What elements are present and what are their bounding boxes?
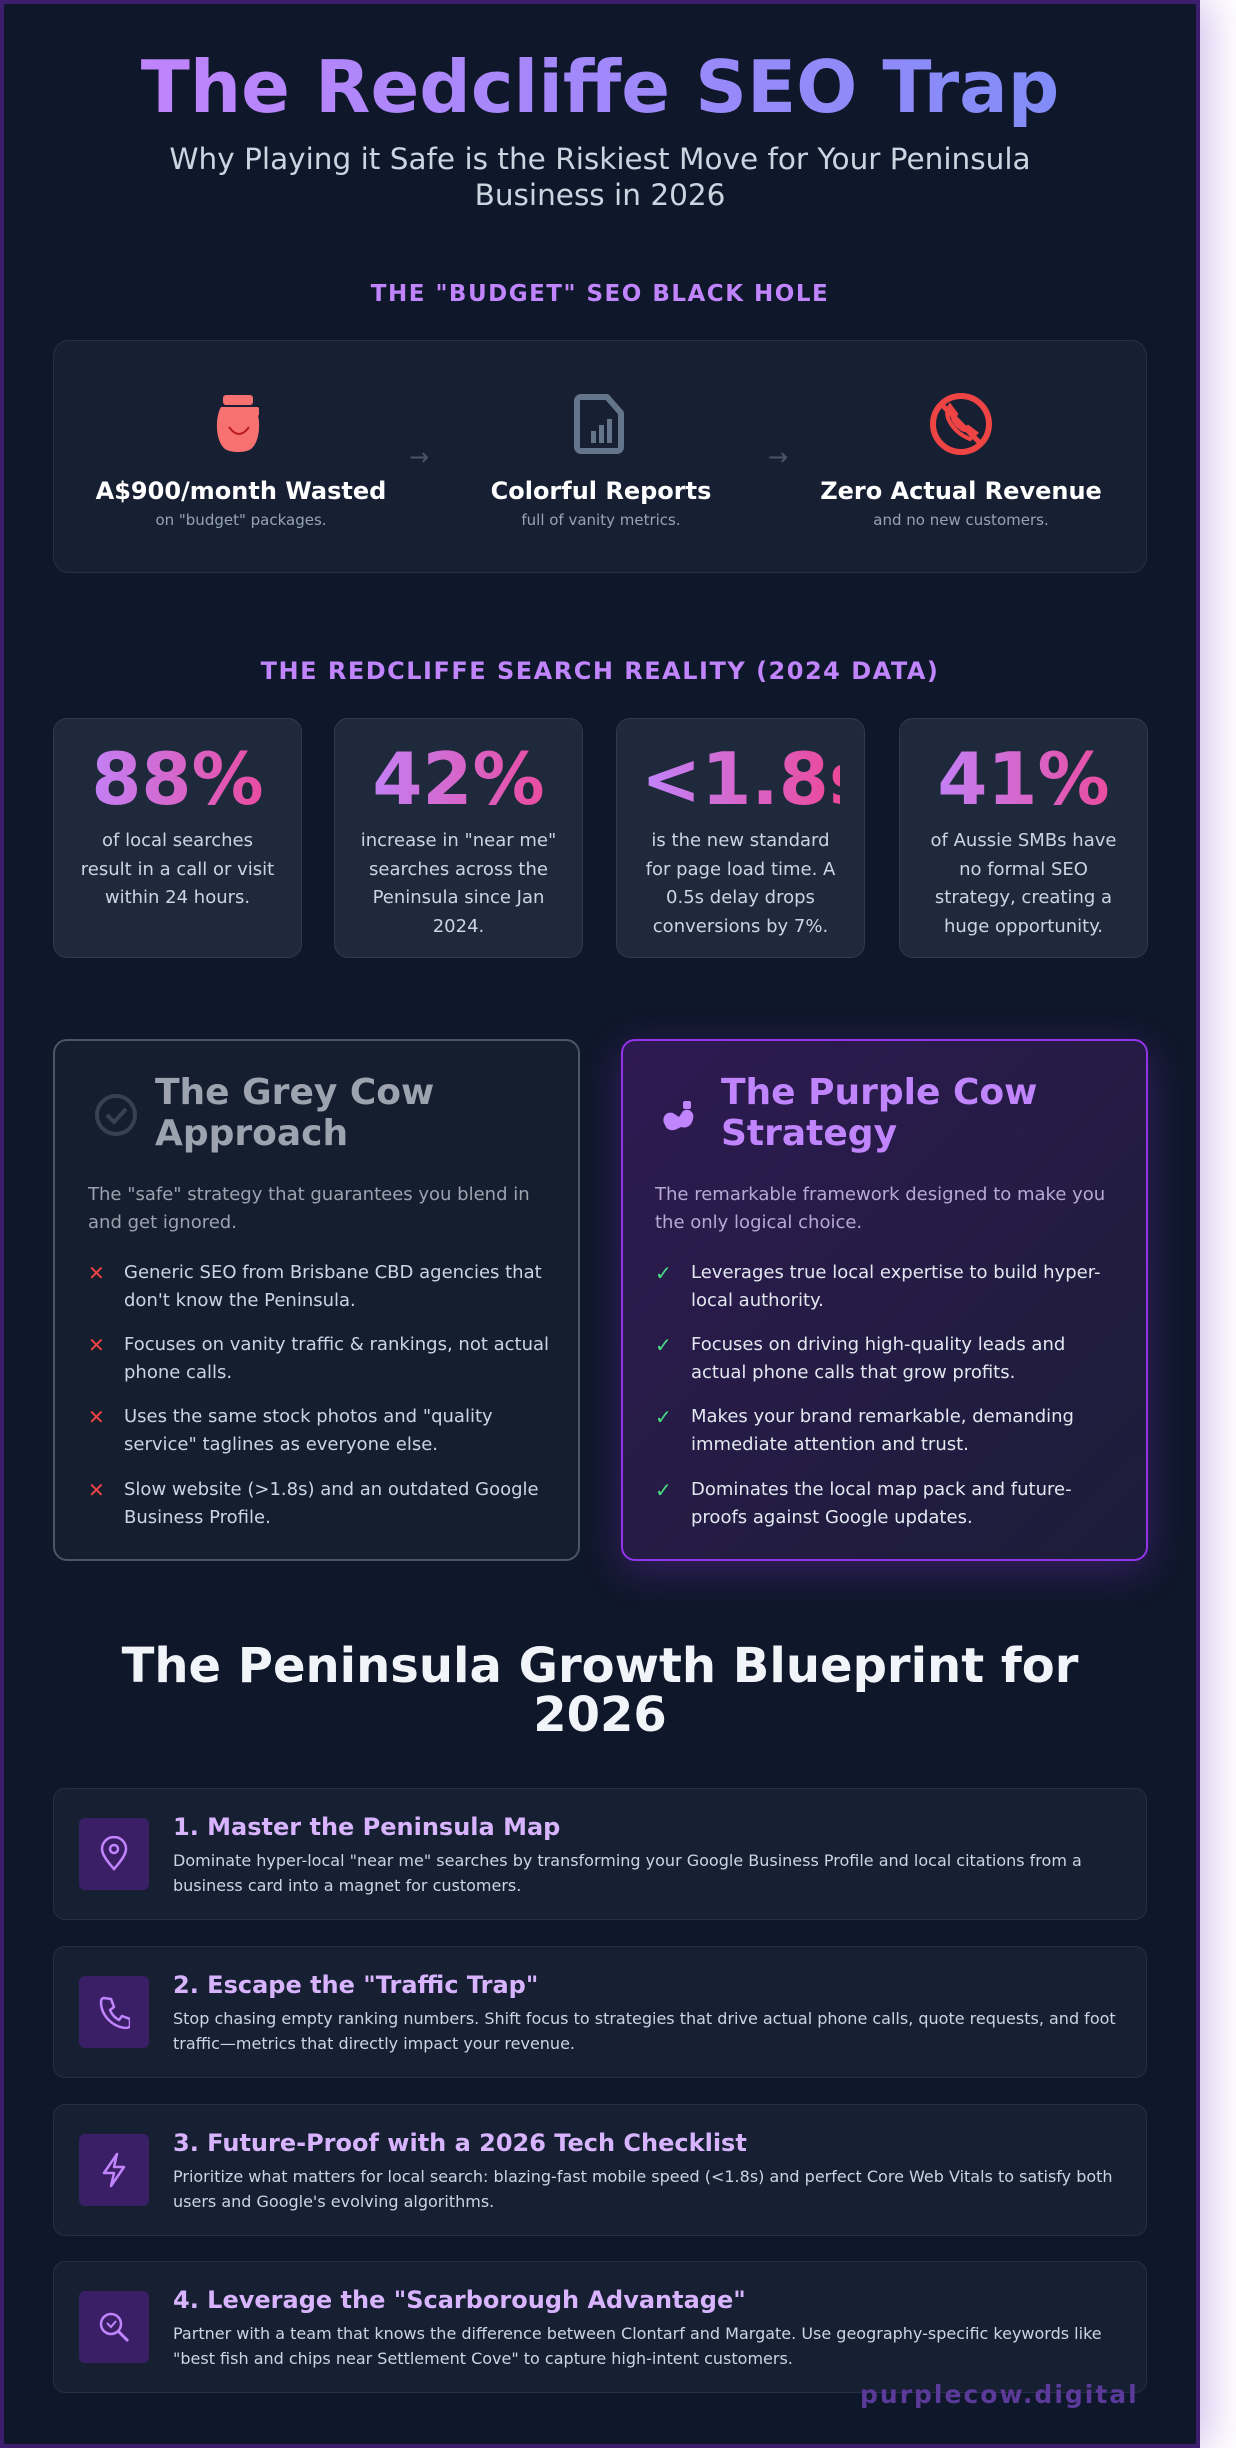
grey bullets: Focuses on vanity traffic & rankings, not actual phone calls.: [124, 1334, 549, 1383]
grey bullets: Generic SEO from Brisbane CBD agencies that don't know the Peninsula.: [124, 1262, 542, 1311]
item: colorful reports: [491, 394, 711, 529]
item: zero revenue: [820, 393, 1102, 529]
step 3: Prioritize what matters for local search: blazing-fast mobile speed (<1.8s) and perfect Core Web Vitals to satisfy both users and Google's evolving algorithms.: [173, 2167, 1113, 2211]
arrow: →: [409, 443, 429, 471]
step 3: [53, 2104, 1147, 2236]
step 4: [53, 2261, 1147, 2393]
panel: black hole flow: [53, 340, 1147, 573]
purple title: [721, 1072, 1037, 1154]
purple title: The Purple Cow: [721, 1072, 1037, 1113]
icon: grey check circle: [95, 1094, 137, 1136]
step 1: [53, 1788, 1147, 1920]
grey title: Approach: [155, 1113, 348, 1154]
purple subtitle: The remarkable framework designed to make you the only logical choice.: [655, 1184, 1105, 1233]
icon: lightning: [79, 2134, 149, 2206]
item: zero revenue: Zero Actual Revenue: [820, 477, 1102, 505]
stat card 1: [53, 718, 302, 958]
purple bullets: ✓: [655, 1405, 672, 1429]
heading: growth blueprint: [122, 1638, 1078, 1743]
step 2: [53, 1946, 1147, 2078]
grey bullets: ✕: [88, 1261, 105, 1285]
icon: phone: [79, 1976, 149, 2048]
grey title: The Grey Cow: [155, 1072, 434, 1113]
icon: report file: [574, 394, 624, 454]
icon: search: [79, 2291, 149, 2363]
item: wasted money: [96, 395, 386, 529]
item: colorful reports: full of vanity metrics.: [521, 511, 681, 529]
icon: phone off: [930, 393, 992, 455]
step 1: Dominate hyper-local "near me" searches by transforming your Google Business Profile and local citations from a business card into a magnet for customers.: [173, 1851, 1082, 1895]
panel: purple cow: [621, 1039, 1148, 1561]
icon: money bag: [216, 395, 260, 452]
purple bullets: ✓: [655, 1478, 672, 1502]
grey bullets: Slow website (>1.8s) and an outdated Google Business Profile.: [124, 1479, 539, 1528]
item: colorful reports: Colorful Reports: [491, 477, 711, 505]
grey bullets: ✕: [88, 1333, 105, 1357]
panel: grey cow: [53, 1039, 580, 1561]
step 2: Stop chasing empty ranking numbers. Shift focus to strategies that drive actual phone calls, quote requests, and foot traffic—metrics that directly impact your revenue.: [173, 2009, 1116, 2053]
grey bullets: ✕: [88, 1478, 105, 1502]
heading: growth blueprint: The Peninsula Growth Blueprint for: [122, 1638, 1078, 1694]
subtitle: Why Playing it Safe is the Riskiest Move for Your Peninsula: [169, 142, 1031, 176]
step 3: 3. Future-Proof with a 2026 Tech Checklist: [173, 2129, 747, 2157]
footer brand: purplecow.digital: [860, 2380, 1139, 2409]
stat card 1: of local searches result in a call or visit within 24 hours.: [81, 830, 274, 908]
heading: budget black hole: THE "BUDGET" SEO BLACK HOLE: [371, 281, 829, 307]
subtitle: [169, 142, 1031, 212]
purple bullets: Leverages true local expertise to build hyper-local authority.: [691, 1262, 1100, 1311]
item: wasted money: A$900/month Wasted: [96, 477, 386, 505]
stat card 3: is the new standard for page load time. A 0.5s delay drops conversions by 7%.: [646, 830, 835, 936]
heading: growth blueprint: 2026: [533, 1687, 667, 1743]
step 4: 4. Leverage the "Scarborough Advantage": [173, 2286, 746, 2314]
item: zero revenue: and no new customers.: [873, 511, 1049, 529]
stat card 2: increase in "near me" searches across the Peninsula since Jan 2024.: [361, 830, 556, 936]
purple title: Strategy: [721, 1113, 897, 1154]
purple bullets: Focuses on driving high-quality leads and actual phone calls that grow profits.: [691, 1334, 1065, 1383]
purple bullets: [655, 1261, 1100, 1528]
icon: map pin: [79, 1818, 149, 1890]
grey bullets: Uses the same stock photos and "quality service" taglines as everyone else.: [124, 1406, 493, 1455]
step 4: Partner with a team that knows the difference between Clontarf and Margate. Use geography-specific keywords like "best fish and chips near Settlement Cove" to capture high-intent customers.: [173, 2324, 1102, 2368]
step 2: 2. Escape the "Traffic Trap": [173, 1971, 538, 1999]
item: wasted money: on "budget" packages.: [155, 511, 327, 529]
purple bullets: ✓: [655, 1261, 672, 1285]
grey bullets: [88, 1261, 549, 1528]
step 1: 1. Master the Peninsula Map: [173, 1813, 560, 1841]
grey subtitle: The "safe" strategy that guarantees you blend in and get ignored.: [88, 1184, 530, 1233]
purple bullets: ✓: [655, 1333, 672, 1357]
purple bullets: Makes your brand remarkable, demanding immediate attention and trust.: [691, 1406, 1074, 1455]
stat card 4: [899, 718, 1148, 958]
heading: search reality: THE REDCLIFFE SEARCH REALITY (2024 DATA): [261, 657, 939, 685]
icon: purple cow: [663, 1101, 694, 1130]
arrow: →: [768, 443, 788, 471]
grey title: [155, 1072, 434, 1154]
subtitle: Business in 2026: [475, 178, 725, 212]
stat card 4: of Aussie SMBs have no formal SEO strategy, creating a huge opportunity.: [931, 830, 1116, 936]
purple bullets: Dominates the local map pack and future-proofs against Google updates.: [691, 1479, 1072, 1528]
stat card 2: [334, 718, 583, 958]
stat card 3: [616, 718, 865, 958]
grey bullets: ✕: [88, 1405, 105, 1429]
title: The Redcliffe SEO Trap: [141, 45, 1059, 129]
